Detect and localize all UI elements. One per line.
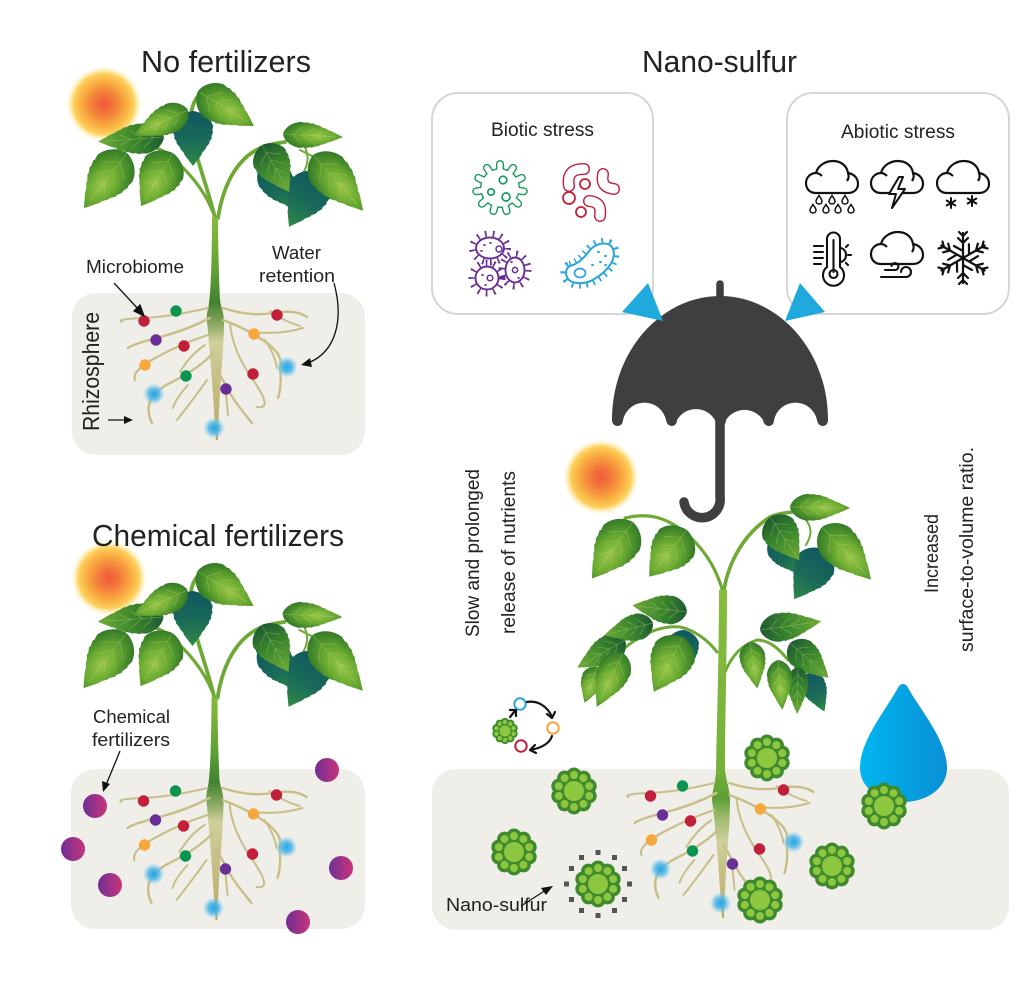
arrow: microbiome [114,283,144,316]
arrow: biotic stress blocked [622,283,663,321]
icon: rain cloud [806,161,858,213]
text: increased surface-to-volume ratio [922,447,978,652]
arrow: water retention [301,283,338,367]
icon: lightning cloud [871,161,923,208]
icon: wind cloud [871,232,923,277]
text: increased surface-to-volume ratio: surface-to-volume ratio. [957,447,978,652]
arrow: chemical fertilizers [102,751,120,792]
label: chemical fertilizers [92,707,170,750]
heading: abiotic stress: Abiotic stress [841,122,955,143]
umbrella [612,284,828,518]
label: water retention: retention [259,266,335,286]
icon: virus [476,164,524,211]
panel: chemical fertilizers soil [71,769,365,929]
title: chemical fertilizers: Chemical fertilizers [92,518,344,553]
text: slow and prolonged release of nutrients [463,469,520,637]
text: slow and prolonged release of nutrients: Slow and prolonged [463,469,484,637]
label: rhizosphere: Rhizosphere [78,312,104,431]
icon: sun, chemical fertilizers [71,540,147,616]
icon: snow cloud [937,161,989,208]
plant: no fertilizers [67,75,379,440]
icon: sun, no fertilizers [66,66,142,142]
text: slow and prolonged release of nutrients: release of nutrients [499,471,520,634]
label: water retention [259,243,335,286]
panel: abiotic stress [787,93,1009,314]
title: no fertilizers: No fertilizers [141,44,311,79]
label: microbiome: Microbiome [86,257,184,277]
icon: thermometer [814,233,851,286]
nano-sulfur particle with charged halo [564,850,632,918]
chemical fertilizer particles [61,758,353,934]
plant: nano-sulfur [570,494,886,918]
label: water retention: Water [272,243,321,263]
label: nano-sulfur: Nano-sulfur [446,895,547,915]
plant: chemical fertilizers [66,555,378,920]
arrow: nano-sulfur [521,886,553,906]
icon: purple germs [472,234,528,293]
panel: biotic stress [432,93,653,314]
title: nano-sulfur: Nano-sulfur [642,44,797,79]
label: chemical fertilizers: Chemical [93,707,170,727]
diagram: nutrient release cycle [492,698,559,753]
icon: snowflake [936,232,990,284]
icon: sun, nano-sulfur [563,439,639,515]
nano-sulfur particles [491,734,907,924]
icon: red bacteria [563,169,614,217]
arrow: rhizosphere [108,416,133,424]
arrow: abiotic stress blocked [785,283,825,321]
icon: water drop [860,684,947,802]
panel: nano-sulfur soil [432,769,1009,930]
label: chemical fertilizers: fertilizers [92,730,170,750]
icon: blue bacterium [566,243,614,283]
panel: no fertilizers soil [72,293,365,455]
heading: biotic stress: Biotic stress [491,120,594,141]
text: increased surface-to-volume ratio: Increased [922,514,943,593]
